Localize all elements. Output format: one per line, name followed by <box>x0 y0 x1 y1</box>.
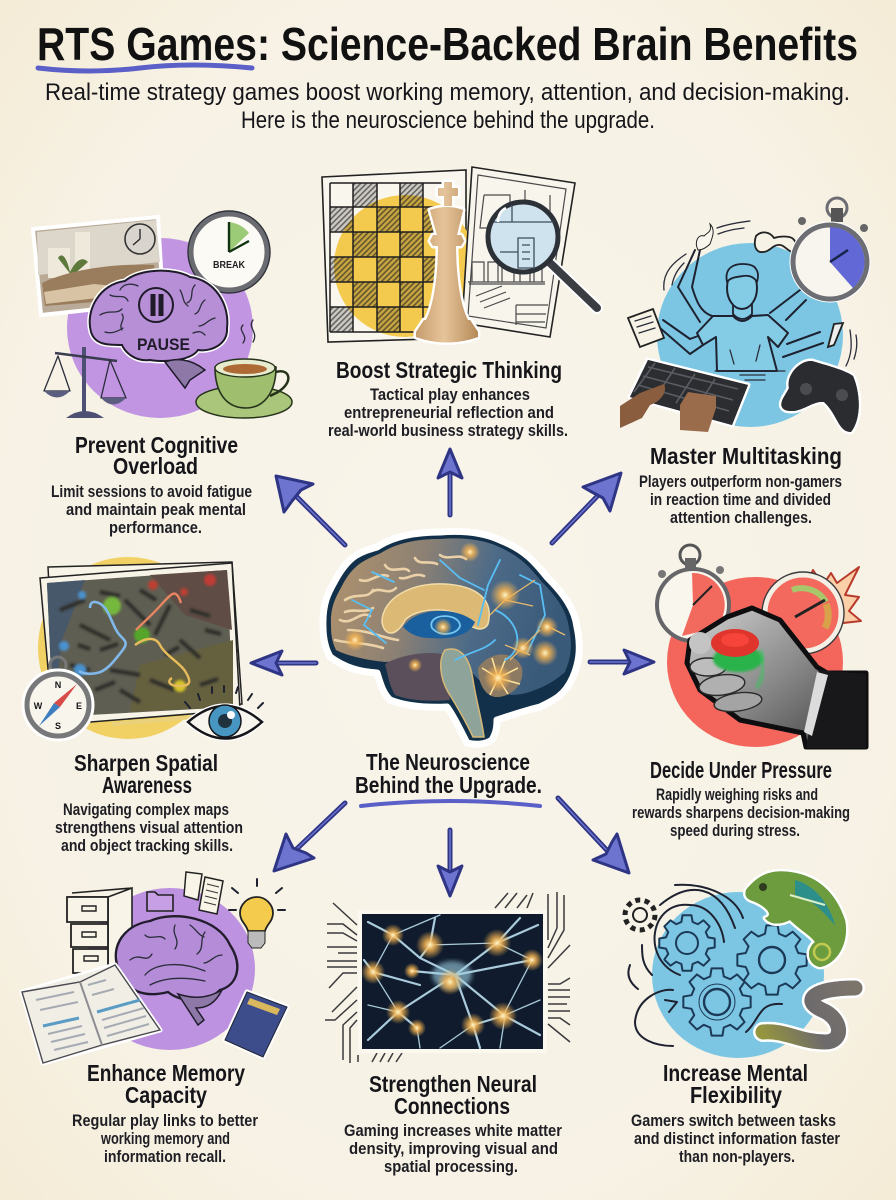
description: real-world business strategy skills. <box>328 422 568 440</box>
arrow to multitasking <box>552 473 621 543</box>
subtitle <box>45 79 850 134</box>
illustration: pause brain, break clock, scale and tea: BREAK <box>213 260 246 271</box>
heading: Decide Under Pressure <box>650 757 832 783</box>
arrows: central brain outward <box>251 449 654 896</box>
description: Rapidly weighing risks and <box>656 786 818 804</box>
panel: master multitasking <box>620 198 868 527</box>
arrow to spatial <box>251 651 316 675</box>
description: and maintain peak mental <box>66 501 246 519</box>
panel: prevent cognitive overload <box>33 211 292 537</box>
heading: Overload <box>113 453 198 479</box>
illustration: chess board, king and blueprint <box>322 167 597 342</box>
arrow to overload <box>276 476 345 545</box>
arrow to neural <box>438 830 462 896</box>
panel: enhance memory capacity <box>22 872 287 1166</box>
description: Gamers switch between tasks <box>631 1112 836 1130</box>
illustration: gears, chameleon and snake <box>625 871 855 1058</box>
heading: Enhance Memory <box>87 1060 245 1086</box>
illustration: game map, compass and eye: W <box>34 701 43 711</box>
description <box>72 1112 258 1166</box>
description: Limit sessions to avoid fatigue <box>51 483 252 501</box>
description <box>639 473 842 527</box>
description <box>328 386 568 440</box>
description: entrepreneurial reflection and <box>344 404 554 422</box>
illustration: hand on button, stopwatch and gauge <box>657 545 866 748</box>
heading: Master Multitasking <box>650 443 842 469</box>
description <box>51 483 252 537</box>
description: working memory and <box>100 1130 230 1148</box>
arrow to strategy <box>438 449 462 515</box>
heading: Capacity <box>125 1082 207 1108</box>
panel: increase mental flexibility <box>625 871 855 1166</box>
arrow to pressure <box>590 650 654 674</box>
panel: boost strategic thinking <box>322 167 597 440</box>
illustration: game map, compass and eye: N <box>55 680 61 690</box>
panel: decide under pressure <box>632 545 866 840</box>
description: and object tracking skills. <box>61 837 233 855</box>
central caption: The Neuroscience <box>366 749 530 775</box>
illustration: neuron network with circuit traces <box>325 892 570 1063</box>
description <box>631 1112 841 1166</box>
heading <box>74 750 218 798</box>
illustration: game map, compass and eye: S <box>55 721 61 731</box>
description: density, improving visual and <box>349 1140 558 1158</box>
description: than non-players. <box>679 1148 795 1166</box>
illustration: pause brain, break clock, scale and tea <box>33 211 292 418</box>
description: performance. <box>109 519 202 537</box>
description <box>55 801 243 855</box>
central caption: Behind the Upgrade. <box>355 772 542 798</box>
central caption <box>355 749 542 806</box>
description: Tactical play enhances <box>370 386 530 404</box>
description: strengthens visual attention <box>55 819 243 837</box>
description: spatial processing. <box>384 1158 518 1176</box>
arrow to memory <box>274 803 345 871</box>
illustration: game map, compass and eye: E <box>76 701 82 711</box>
description <box>344 1122 563 1176</box>
heading: Prevent Cognitive <box>75 432 238 458</box>
panel: sharpen spatial awareness <box>23 557 263 855</box>
heading: Awareness <box>102 772 192 798</box>
description: Navigating complex maps <box>63 801 229 819</box>
central glowing brain <box>323 531 579 744</box>
heading: Increase Mental <box>663 1060 808 1086</box>
description: Gaming increases white matter <box>344 1122 563 1140</box>
heading <box>75 432 238 479</box>
description: attention challenges. <box>670 509 812 527</box>
heading <box>369 1071 537 1119</box>
panel: strengthen neural connections <box>325 892 570 1176</box>
heading: Sharpen Spatial <box>74 750 218 776</box>
illustration: game map, compass and eye <box>23 557 263 740</box>
description: and distinct information faster <box>634 1130 841 1148</box>
illustration: brain, cabinet, notebook, SD card and lightbulb <box>22 872 287 1063</box>
description: speed during stress. <box>670 822 800 840</box>
arrow to flexibility <box>558 798 629 873</box>
illustration: pause brain, break clock, scale and tea: PAUSE <box>137 335 190 354</box>
subtitle: Real-time strategy games boost working memory, attention, and decision-making. <box>45 79 850 106</box>
description: Regular play links to better <box>72 1112 258 1130</box>
heading: Strengthen Neural <box>369 1071 537 1097</box>
heading: Boost Strategic Thinking <box>336 357 562 383</box>
heading: Connections <box>394 1093 510 1119</box>
heading: Flexibility <box>690 1082 782 1108</box>
description: Players outperform non-gamers <box>639 473 842 491</box>
description <box>632 786 850 840</box>
description: in reaction time and divided <box>650 491 831 509</box>
illustration: multitasking person, stopwatch, keyboard and controller <box>620 198 868 432</box>
heading <box>87 1060 245 1108</box>
subtitle: Here is the neuroscience behind the upgrade. <box>241 107 655 134</box>
heading <box>663 1060 808 1108</box>
description: information recall. <box>104 1148 226 1166</box>
